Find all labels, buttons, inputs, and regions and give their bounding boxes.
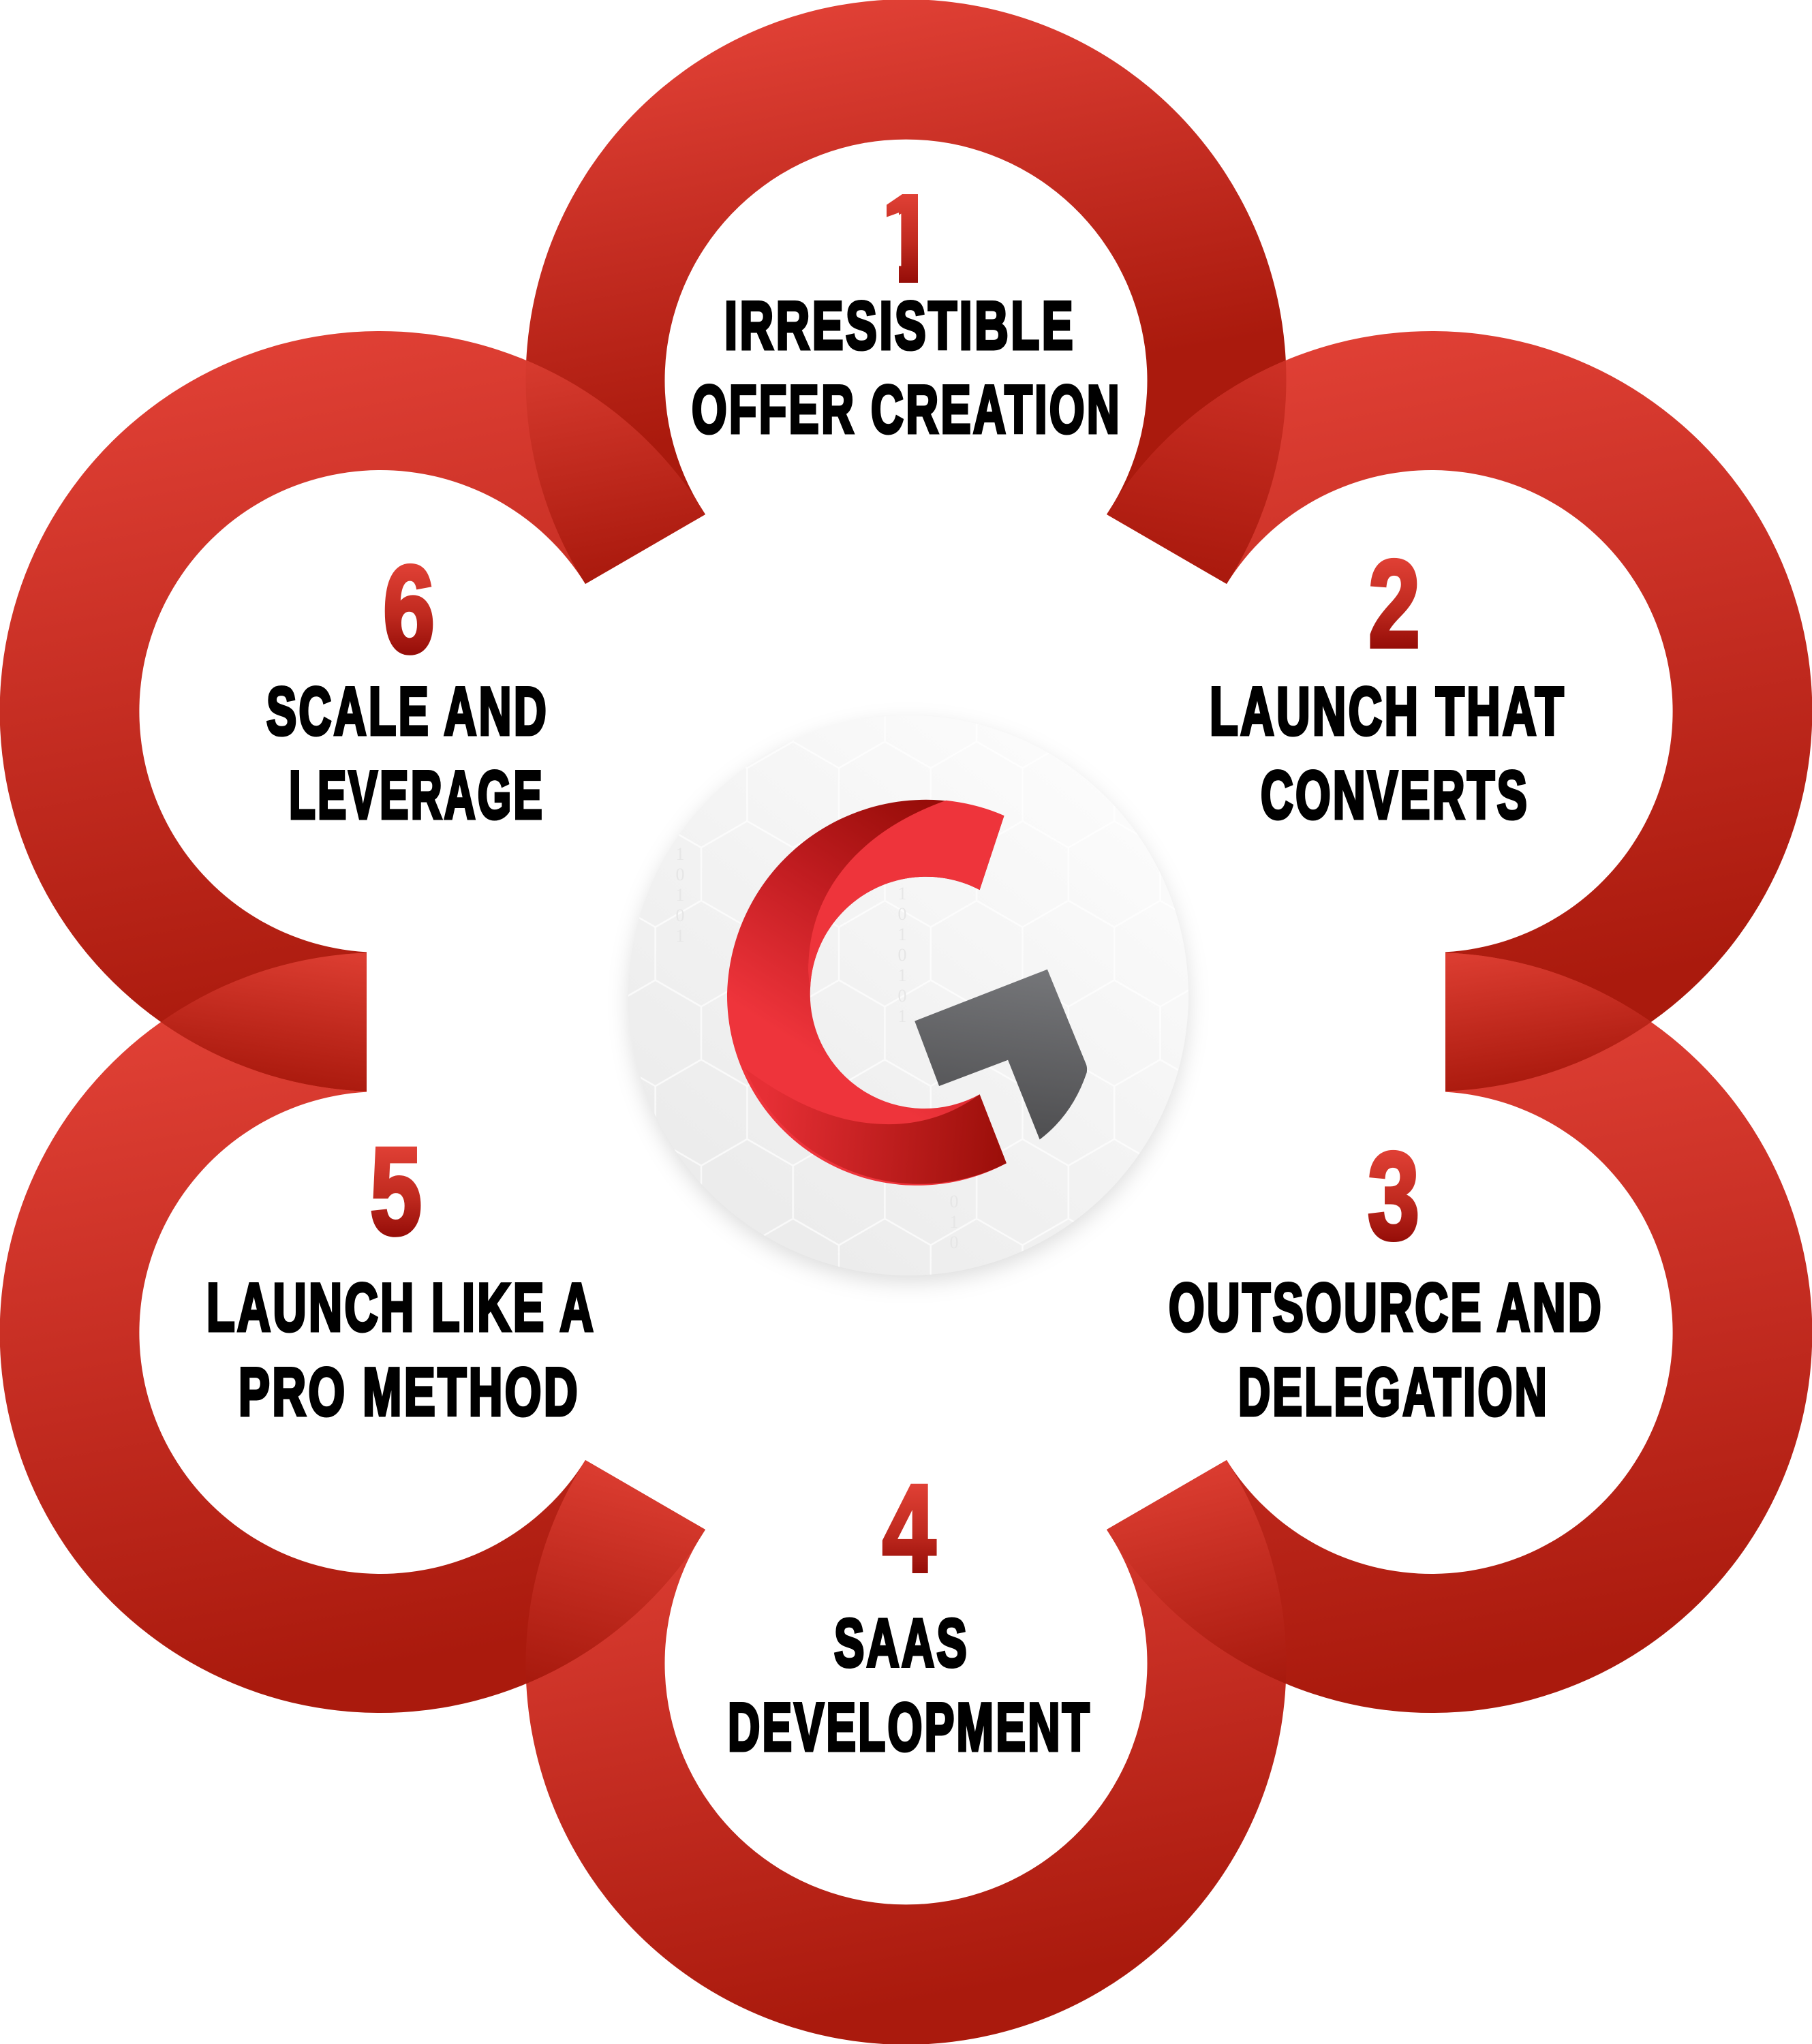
- step 3 title: OUTSOURCE AND: [1169, 1269, 1603, 1345]
- step 3 title: DELEGATION: [1238, 1354, 1549, 1429]
- faint binary digits: 1: [676, 885, 684, 905]
- faint binary digits: 1: [898, 1006, 906, 1026]
- faint binary digits: 0: [676, 865, 684, 884]
- ring 6: [0, 331, 705, 1091]
- step 2 title: CONVERTS: [1261, 757, 1529, 833]
- G upper body shading: [727, 800, 1007, 1186]
- step 6 label: [266, 540, 549, 833]
- faint binary digits: 0: [676, 905, 684, 925]
- centre logo badge: [628, 715, 1188, 1282]
- number 4: 4: [882, 1459, 936, 1598]
- step 3 label: [1169, 1126, 1603, 1429]
- number 6: 6: [383, 540, 435, 679]
- step 5 label: [206, 1121, 596, 1429]
- overlap fold: rings 5 and 6: [161, 953, 367, 1091]
- step 2 title: LAUNCH THAT: [1210, 673, 1566, 749]
- ring 1: [526, 0, 1286, 584]
- faint binary digits: 0: [898, 904, 906, 924]
- step 6 title: LEVERAGE: [289, 757, 544, 833]
- faint binary digits: 0: [898, 945, 906, 965]
- faint binary digits: 1: [950, 1212, 958, 1232]
- faint binary digits: 0: [950, 1233, 958, 1252]
- overlap fold: rings 3 and 4: [1107, 1460, 1286, 1684]
- step 5 title: LAUNCH LIKE A: [206, 1269, 596, 1345]
- ring 5: [0, 953, 705, 1713]
- ring 3: [1107, 953, 1812, 1713]
- badge disc: [628, 715, 1188, 1275]
- number 2: 2: [1368, 534, 1420, 673]
- overlap fold: rings 2 and 3: [1445, 953, 1650, 1091]
- G upper bright face: [808, 801, 1004, 988]
- number 3: 3: [1368, 1126, 1419, 1265]
- ring 2: [1107, 331, 1812, 1091]
- step 4 label: [728, 1459, 1092, 1765]
- step 1 label: [692, 194, 1118, 435]
- step 5 title: PRO METHOD: [239, 1354, 580, 1429]
- faint binary digits: 1: [898, 925, 906, 944]
- faint binary digits: [676, 844, 958, 1252]
- step 2 label: [1210, 534, 1566, 833]
- overlap fold: rings 1 and 2: [1107, 360, 1287, 584]
- faint binary digits: 1: [898, 884, 906, 903]
- step 1 title: OFFER CREATION: [692, 371, 1122, 447]
- overlap fold: rings 6 and 1: [526, 360, 705, 584]
- number 1: 1: [876, 168, 941, 307]
- badge shadow: [630, 724, 1187, 1282]
- step 4 title: SAAS: [834, 1605, 969, 1680]
- G lower fold: [746, 1069, 1007, 1184]
- overlap fold: rings 4 and 5: [526, 1460, 705, 1684]
- G grey arrow corner: [915, 970, 1087, 1139]
- faint binary digits: 1: [676, 926, 684, 946]
- faint binary digits: 1: [676, 844, 684, 864]
- ring 4: [526, 1460, 1287, 2044]
- step 1 title: IRRESISTIBLE: [724, 288, 1075, 363]
- step 6 title: SCALE AND: [266, 673, 549, 749]
- faint binary digits: 0: [898, 986, 906, 1006]
- hexagon pattern: [628, 715, 1188, 1275]
- logo letter G: [727, 800, 1087, 1186]
- faint binary digits: 0: [950, 1192, 958, 1211]
- faint binary digits: 1: [898, 965, 906, 985]
- step 4 title: DEVELOPMENT: [728, 1689, 1092, 1765]
- number 5: 5: [370, 1121, 422, 1260]
